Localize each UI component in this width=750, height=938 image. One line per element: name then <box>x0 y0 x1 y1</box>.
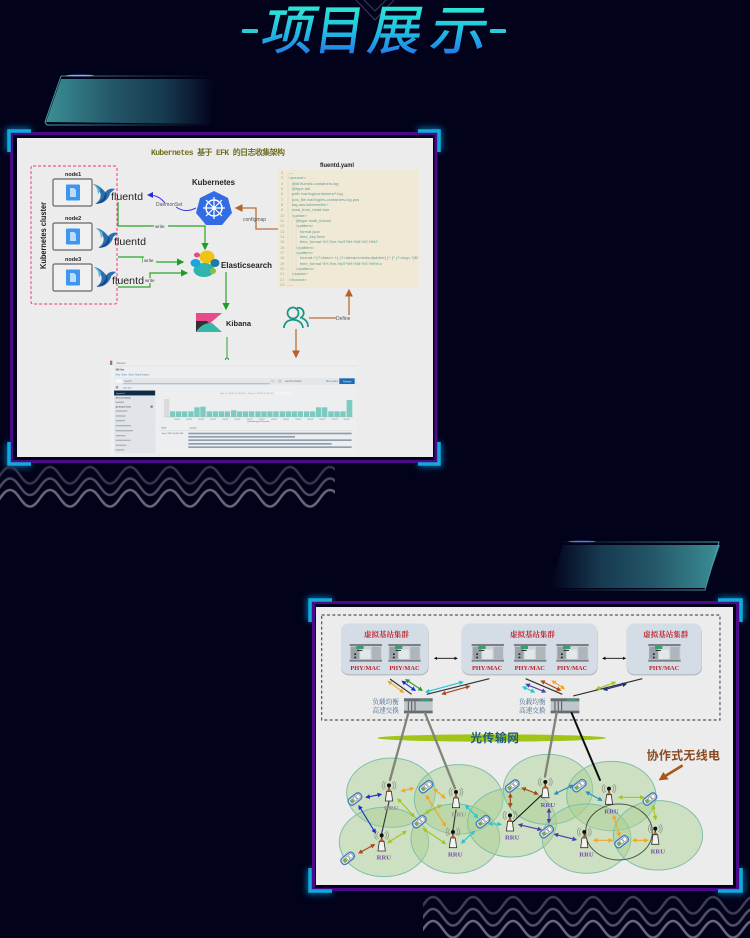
kubernetes logo: Kubernetes <box>192 178 236 187</box>
section tag: top left <box>45 75 215 125</box>
kibana dashboard screenshot: Selected fields <box>116 397 132 400</box>
kibana dashboard screenshot: _source <box>187 428 197 430</box>
RRU labels: RRU <box>579 851 594 858</box>
config code block: @type tail <box>292 186 310 191</box>
config code block: 19 <box>280 261 285 266</box>
config code block: 4 <box>281 181 284 186</box>
write labels: write <box>144 258 154 263</box>
config code block: 7 <box>281 197 284 202</box>
cluster 2: PHY/MAC <box>557 665 588 672</box>
RRU labels: RRU <box>452 812 466 819</box>
node 2: node2 <box>65 216 81 222</box>
write labels: write <box>145 278 155 283</box>
RRU labels: RRU <box>651 848 665 855</box>
kibana dashboard screenshot: Refresh <box>343 380 352 383</box>
cluster 3: PHY/MAC <box>649 665 680 672</box>
kibana dashboard screenshot: Search <box>124 380 132 383</box>
cluster boundary <box>31 166 117 304</box>
section tag: right <box>547 541 720 590</box>
kibana dashboard screenshot: Discover <box>117 362 126 365</box>
config code block: 15 <box>280 239 285 244</box>
cluster 1: 虚拟基站集群 <box>364 629 409 639</box>
config code block: time_format %Y-%m-%dT%H:%M:%S.%NZ <box>300 239 378 244</box>
config code block: 18 <box>280 255 285 260</box>
config code block <box>278 170 419 288</box>
config code block: 13 <box>280 229 285 234</box>
switch right: 高速交换 <box>519 706 546 715</box>
kibana dashboard screenshot: Show dates <box>326 380 339 383</box>
diagram title: Kubernetes 基于 EFK 的日志收集架构 <box>151 147 285 158</box>
config code block: 14 <box>280 234 285 239</box>
RRU towers <box>375 778 662 851</box>
node 3 <box>53 257 92 291</box>
config code block: --- <box>289 282 294 287</box>
config code block: <parse> <box>292 213 307 218</box>
user to dashboard arrow <box>295 329 297 357</box>
config code block: 9 <box>281 207 284 212</box>
configmap arrow <box>236 208 278 229</box>
config code block: </pattern> <box>296 266 315 271</box>
config code block: pos_file /var/log/es-containers.log.pos <box>292 197 359 202</box>
cluster 1 <box>341 623 429 675</box>
config code block: time_key time <box>300 234 325 239</box>
mobile phones <box>340 778 658 866</box>
panel: EFK frame <box>9 131 439 464</box>
RRU labels: RRU <box>384 805 399 812</box>
RRU labels: RRU <box>541 802 555 809</box>
kibana dashboard screenshot: Save <box>122 375 128 377</box>
switch left: 负载均衡 <box>372 697 399 706</box>
title: 项 <box>256 2 323 61</box>
coverage cells <box>339 754 703 877</box>
RRU labels: RRU <box>604 809 619 816</box>
histogram bars <box>170 400 352 417</box>
RRU labels: RRU <box>377 855 391 862</box>
switch left: 高速交换 <box>372 706 399 715</box>
config code block: @type multi_format <box>296 218 332 223</box>
kubernetes logo <box>192 178 236 225</box>
config code block: 6 <box>281 191 284 196</box>
write arrows <box>118 202 226 309</box>
kibana dashboard screenshot: 689 hits <box>116 368 125 371</box>
elasticsearch logo: Elasticsearch <box>221 261 272 270</box>
cluster 2: 虚拟基站集群 <box>510 629 555 639</box>
fluentd 3: fluentd <box>112 275 144 287</box>
kibana dashboard screenshot: Available fields <box>116 405 132 408</box>
config code block: 8 <box>281 202 284 207</box>
EFK diagram image <box>17 138 433 457</box>
wave decoration: left <box>0 467 350 506</box>
config code block: 20 <box>280 266 285 271</box>
write labels: write <box>155 224 165 229</box>
kibana dashboard screenshot <box>110 360 357 454</box>
write labels <box>143 223 168 283</box>
config code block: </parse> <box>292 271 308 276</box>
node 2 <box>53 216 92 250</box>
title: 目 <box>311 1 368 60</box>
title back diamond <box>356 0 394 20</box>
RRU labels: RRU <box>505 835 520 842</box>
config code block: </source> <box>289 277 307 282</box>
collaborative cell outline <box>586 804 652 860</box>
config code block: @id fluentd-containers.log <box>292 181 339 186</box>
config code block: 2 <box>281 170 284 175</box>
kibana dashboard screenshot: + Add filter <box>122 386 132 389</box>
RRU labels <box>377 802 665 862</box>
config code block: <pattern> <box>296 223 314 228</box>
title: 展 <box>363 2 429 61</box>
bracket glow <box>9 131 439 464</box>
cluster 1: PHY/MAC <box>389 665 420 672</box>
fluentd 2: fluentd <box>114 236 146 248</box>
switch right: 负载均衡 <box>519 697 546 706</box>
config heading: fluentd.yaml <box>320 162 354 169</box>
optical network label: 光传输网 <box>470 731 519 745</box>
config code block: tag raw.kubernetes.* <box>292 202 329 207</box>
collaborative radio callout: 协作式无线电 <box>647 747 720 762</box>
node 3: node3 <box>65 257 81 263</box>
kibana dashboard screenshot: Open <box>128 375 135 377</box>
config code block: 16 <box>280 245 285 250</box>
config code block: 17 <box>280 250 285 255</box>
kibana dashboard screenshot: Time <box>161 428 167 430</box>
daemonset arrow <box>148 195 196 211</box>
kibana dashboard screenshot: Share <box>135 374 142 377</box>
kibana dashboard screenshot: New <box>116 375 121 377</box>
config code block: <source> <box>289 175 306 180</box>
configmap arrow: configmap <box>243 217 266 223</box>
daemonset arrow: DaemonSet <box>156 202 183 208</box>
config code block: 10 <box>280 213 285 218</box>
fluentd 1: fluentd <box>111 191 143 203</box>
fluentd 3 <box>94 267 144 287</box>
define arrow: Define <box>336 316 351 322</box>
RRU labels: RRU <box>448 851 463 858</box>
node 1 <box>53 172 92 206</box>
dashed boundary <box>322 615 720 720</box>
title <box>242 0 506 61</box>
config code block: 12 <box>280 223 285 228</box>
C-RAN diagram image <box>316 607 733 885</box>
cluster 2: PHY/MAC <box>515 665 545 672</box>
config code block: read_from_head true <box>292 207 330 212</box>
config code block: --- <box>289 170 294 175</box>
config code block: 21 <box>280 271 285 276</box>
node 1: node1 <box>65 172 81 178</box>
bracket glow <box>310 600 741 891</box>
kibana logo: Kibana <box>226 319 252 328</box>
define arrow <box>309 290 351 322</box>
kibana dashboard screenshot: Last 15 minutes <box>285 380 302 383</box>
config code block: 11 <box>280 218 285 223</box>
optical transport ellipse <box>377 734 606 742</box>
config code block: <pattern> <box>296 250 314 255</box>
diagram: collaborative radio network <box>339 713 720 877</box>
config code block: format /^(?<time>.+) (?<stream>stdout|stderr) [^ ]* (?<log>.*)$/ <box>300 255 419 260</box>
kibana logo <box>196 313 252 332</box>
kibana to dashboard line <box>226 337 228 361</box>
config code block: 22 <box>280 277 285 282</box>
wave decoration: right <box>413 897 750 938</box>
diagram: virtual base station clusters <box>322 615 720 720</box>
fluentd 1 <box>93 184 143 204</box>
elasticsearch logo <box>190 250 272 277</box>
config code block: 3 <box>281 175 284 180</box>
diagram: EFK architecture <box>31 147 419 454</box>
switch right <box>519 697 579 715</box>
config code block: time_format %Y-%m-%dT%H:%M:%S.%N%:z <box>300 261 382 266</box>
cluster 3: 虚拟基站集群 <box>643 629 689 639</box>
cluster 3 <box>627 623 702 675</box>
kibana dashboard screenshot: @timestamp per 30 seconds <box>247 420 269 423</box>
radio link arrows <box>359 785 656 853</box>
users icon <box>284 308 308 328</box>
cluster 2 <box>462 623 598 675</box>
cluster 2: PHY/MAC <box>472 665 503 672</box>
fluentd 2 <box>96 228 146 248</box>
collaborative radio callout <box>647 747 720 780</box>
cluster 1: PHY/MAC <box>350 665 381 672</box>
config code block: 5 <box>281 186 284 191</box>
title: 示 <box>426 1 494 60</box>
fibre links <box>382 713 600 833</box>
config code block: 23 <box>280 282 285 287</box>
kibana dashboard screenshot: Sep 4, 2019 @ 09:00 - Sep 4, 2019 @ 09:15 <box>220 393 274 395</box>
config code block: path /var/log/containers/*.log <box>292 191 343 196</box>
fronthaul arrows <box>388 679 642 696</box>
cluster label: Kubernetes cluster <box>39 202 48 269</box>
config code block: format json <box>300 229 320 234</box>
kibana dashboard screenshot: Sep 4, 2019 @ 09:14:38 <box>162 433 184 435</box>
cluster links <box>435 657 625 660</box>
config code block: </pattern> <box>296 245 315 250</box>
panel: cloud RAN frame <box>310 600 741 891</box>
kibana dashboard screenshot: Inspect <box>142 374 150 377</box>
kibana dashboard screenshot: logstash-* <box>116 392 126 395</box>
switch left <box>372 697 433 715</box>
